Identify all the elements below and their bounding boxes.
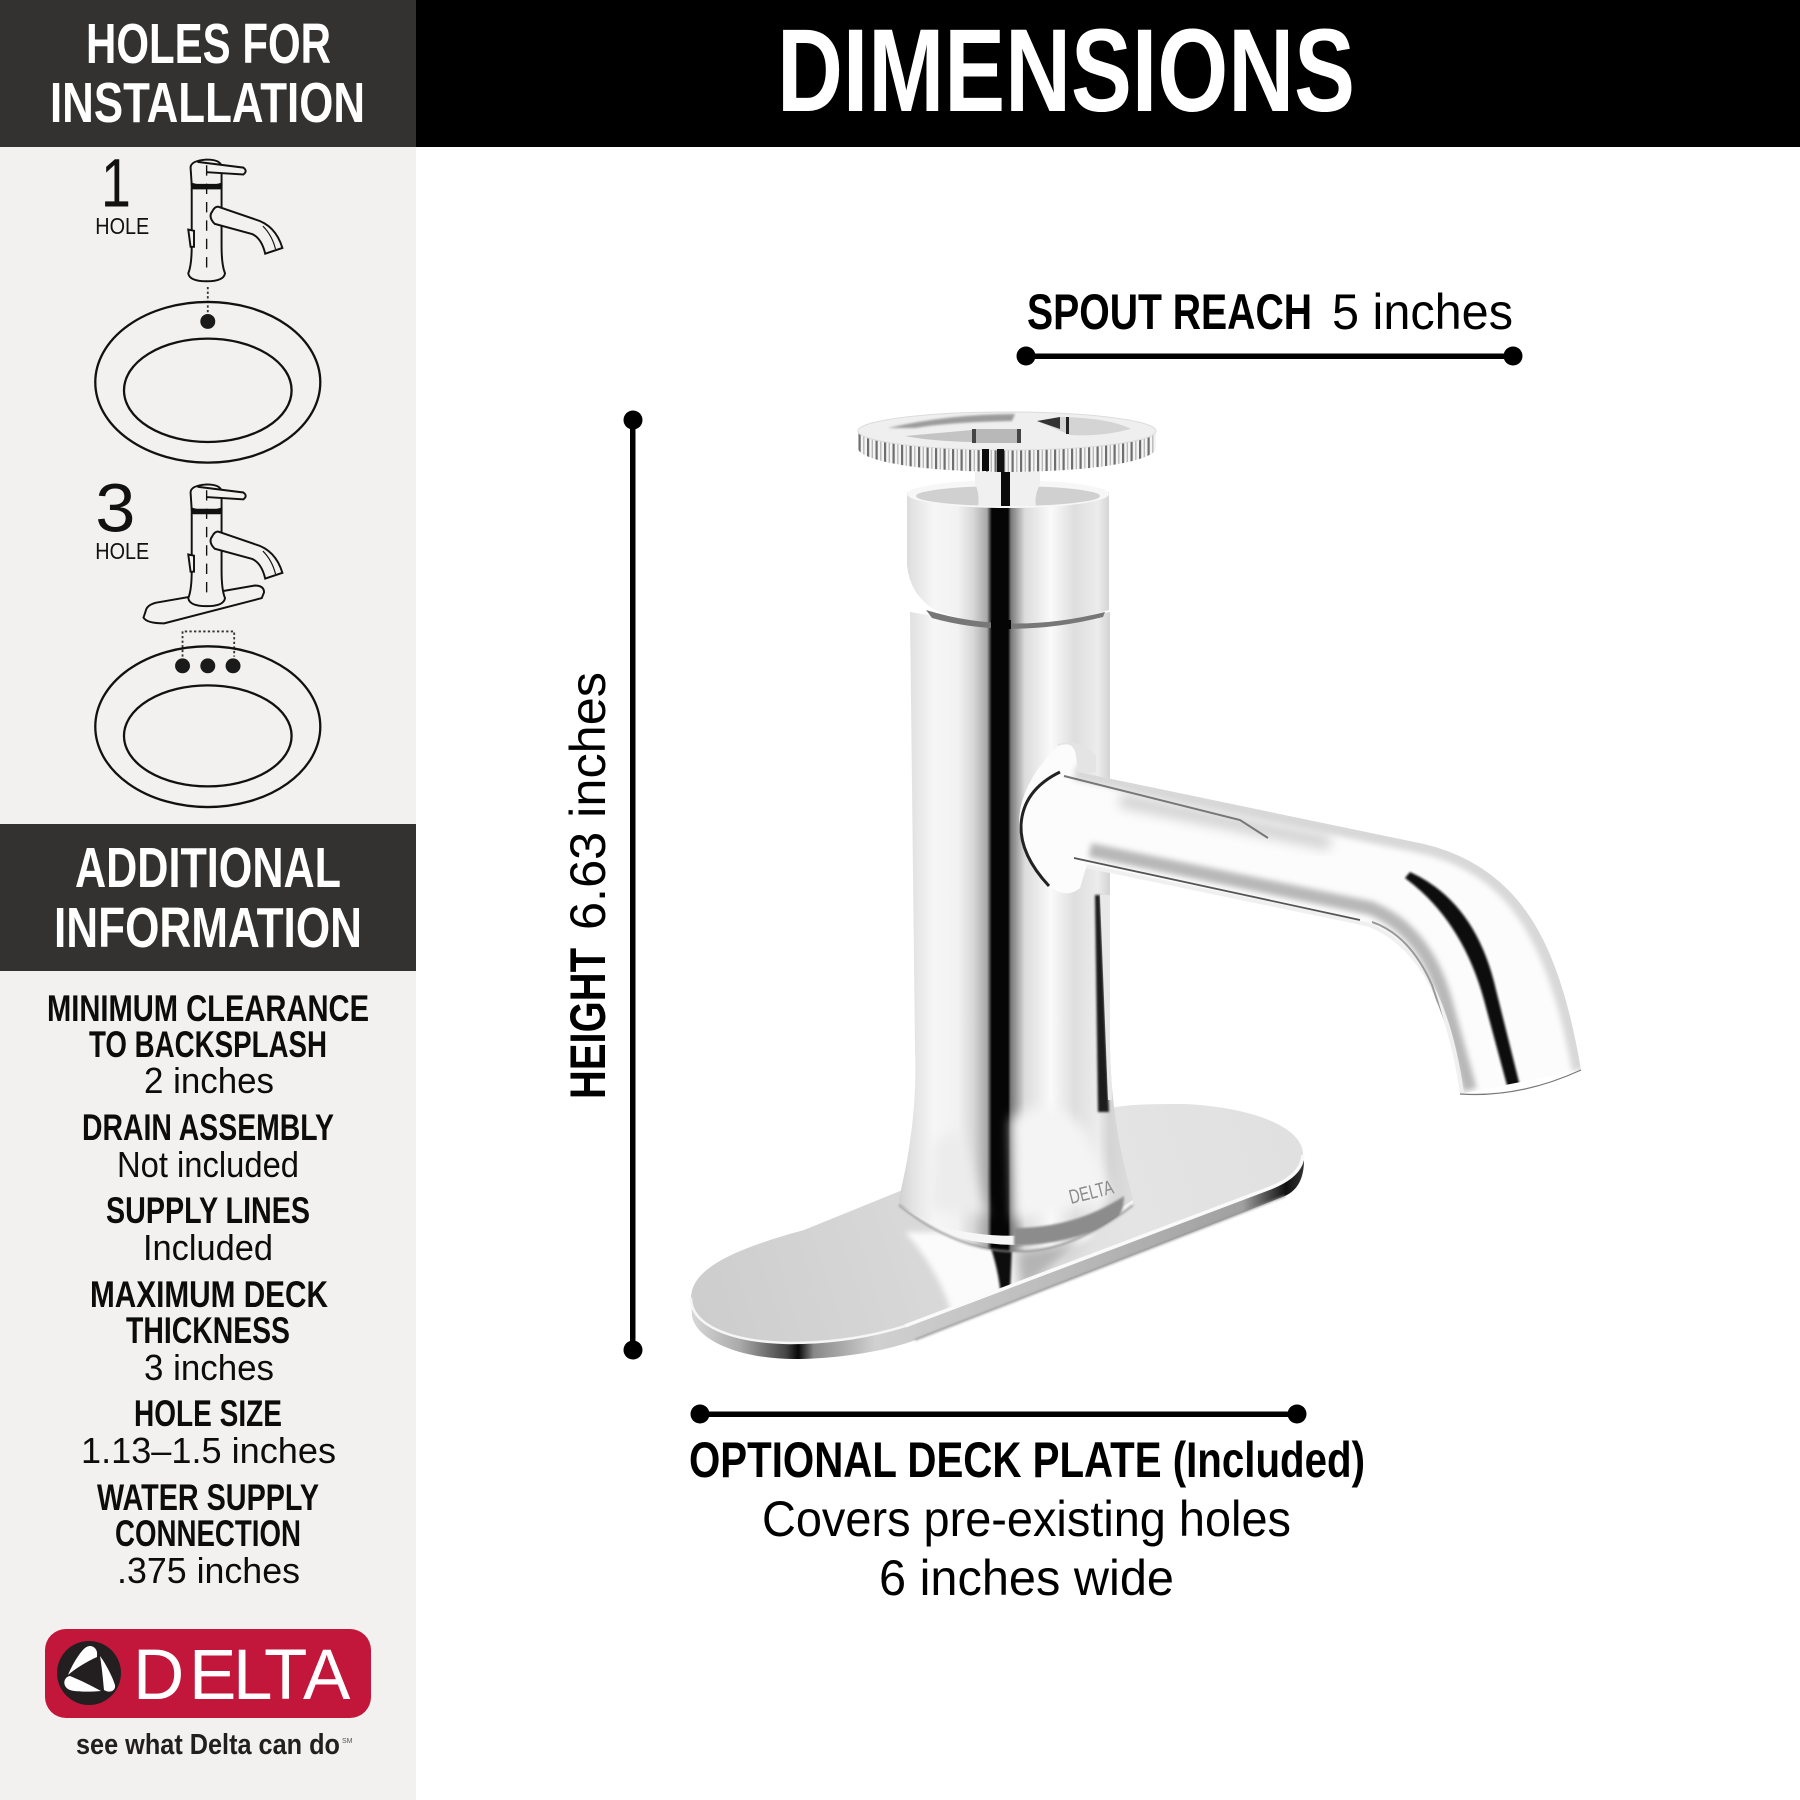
icon: one hole installation: 1	[101, 145, 131, 222]
text block: additional information list: MAXIMUM DECK	[90, 1274, 328, 1315]
deck plate	[691, 1104, 1304, 1359]
label: height	[560, 672, 616, 1099]
panel: additional information heading: ADDITIONAL	[75, 836, 341, 900]
logo: delta	[45, 1629, 371, 1761]
text block: additional information list	[47, 988, 369, 1591]
label: spout reach: SPOUT REACH	[1027, 284, 1312, 340]
arrow: spout reach dimension line	[1016, 346, 1522, 366]
text block: additional information list: HOLE SIZE	[134, 1393, 282, 1434]
text block: optional deck plate	[689, 1432, 1365, 1606]
text block: optional deck plate: 6 inches wide	[879, 1550, 1174, 1606]
chart: faucet illustration	[691, 412, 1581, 1359]
panel: left sidebar	[0, 0, 416, 1800]
text block: additional information list: 3 inches	[144, 1347, 274, 1388]
logo: delta: see what Delta can do	[76, 1729, 340, 1761]
arrow: height dimension line	[624, 410, 642, 1360]
label: height: HEIGHT	[560, 948, 616, 1099]
text block: additional information list: TO BACKSPLASH	[89, 1024, 327, 1065]
spout	[1019, 742, 1581, 1094]
text block: additional information list: CONNECTION	[115, 1513, 301, 1554]
text block: additional information list: Not included	[117, 1144, 299, 1185]
icon: three hole installation: HOLE	[95, 538, 149, 564]
faucet body: DELTA	[1067, 1177, 1116, 1209]
icon: one hole installation: HOLE	[95, 213, 149, 239]
wheel handle	[858, 412, 1156, 472]
logo: delta: DELTA	[133, 1636, 351, 1715]
panel: holes for installation heading: HOLES FOR	[86, 12, 331, 76]
handle cap	[907, 472, 1109, 629]
title: dimensions: DIMENSIONS	[777, 5, 1355, 137]
text block: additional information list: SUPPLY LINES	[106, 1190, 310, 1231]
text block: additional information list: WATER SUPPLY	[97, 1477, 319, 1518]
icon: one hole installation	[95, 145, 320, 463]
text block: optional deck plate: OPTIONAL DECK PLATE (Included)	[689, 1432, 1365, 1488]
label: height: 6.63 inches	[560, 672, 616, 930]
arrow: deck plate dimension line	[690, 1404, 1306, 1424]
faucet body	[899, 612, 1133, 1252]
panel: additional information heading: INFORMATION	[54, 896, 362, 960]
text block: additional information list: 1.13–1.5 inches	[81, 1430, 336, 1471]
logo: delta: SM	[342, 1738, 353, 1745]
text block: optional deck plate: Covers pre-existing holes	[762, 1491, 1291, 1547]
text block: additional information list: MINIMUM CLEARANCE	[47, 988, 369, 1029]
text block: additional information list: .375 inches	[117, 1550, 300, 1591]
title: dimensions	[416, 0, 1800, 147]
text block: additional information list: DRAIN ASSEMBLY	[82, 1107, 334, 1148]
text block: additional information list: THICKNESS	[126, 1310, 290, 1351]
panel: additional information heading	[0, 824, 416, 971]
panel: holes for installation heading	[0, 0, 416, 147]
panel: holes for installation heading: INSTALLATION	[50, 71, 365, 135]
icon: three hole installation	[95, 470, 320, 807]
text block: additional information list: 2 inches	[144, 1060, 274, 1101]
icon: three hole installation: 3	[95, 470, 135, 547]
label: spout reach: 5 inches	[1332, 284, 1513, 340]
text block: additional information list: Included	[143, 1227, 273, 1268]
